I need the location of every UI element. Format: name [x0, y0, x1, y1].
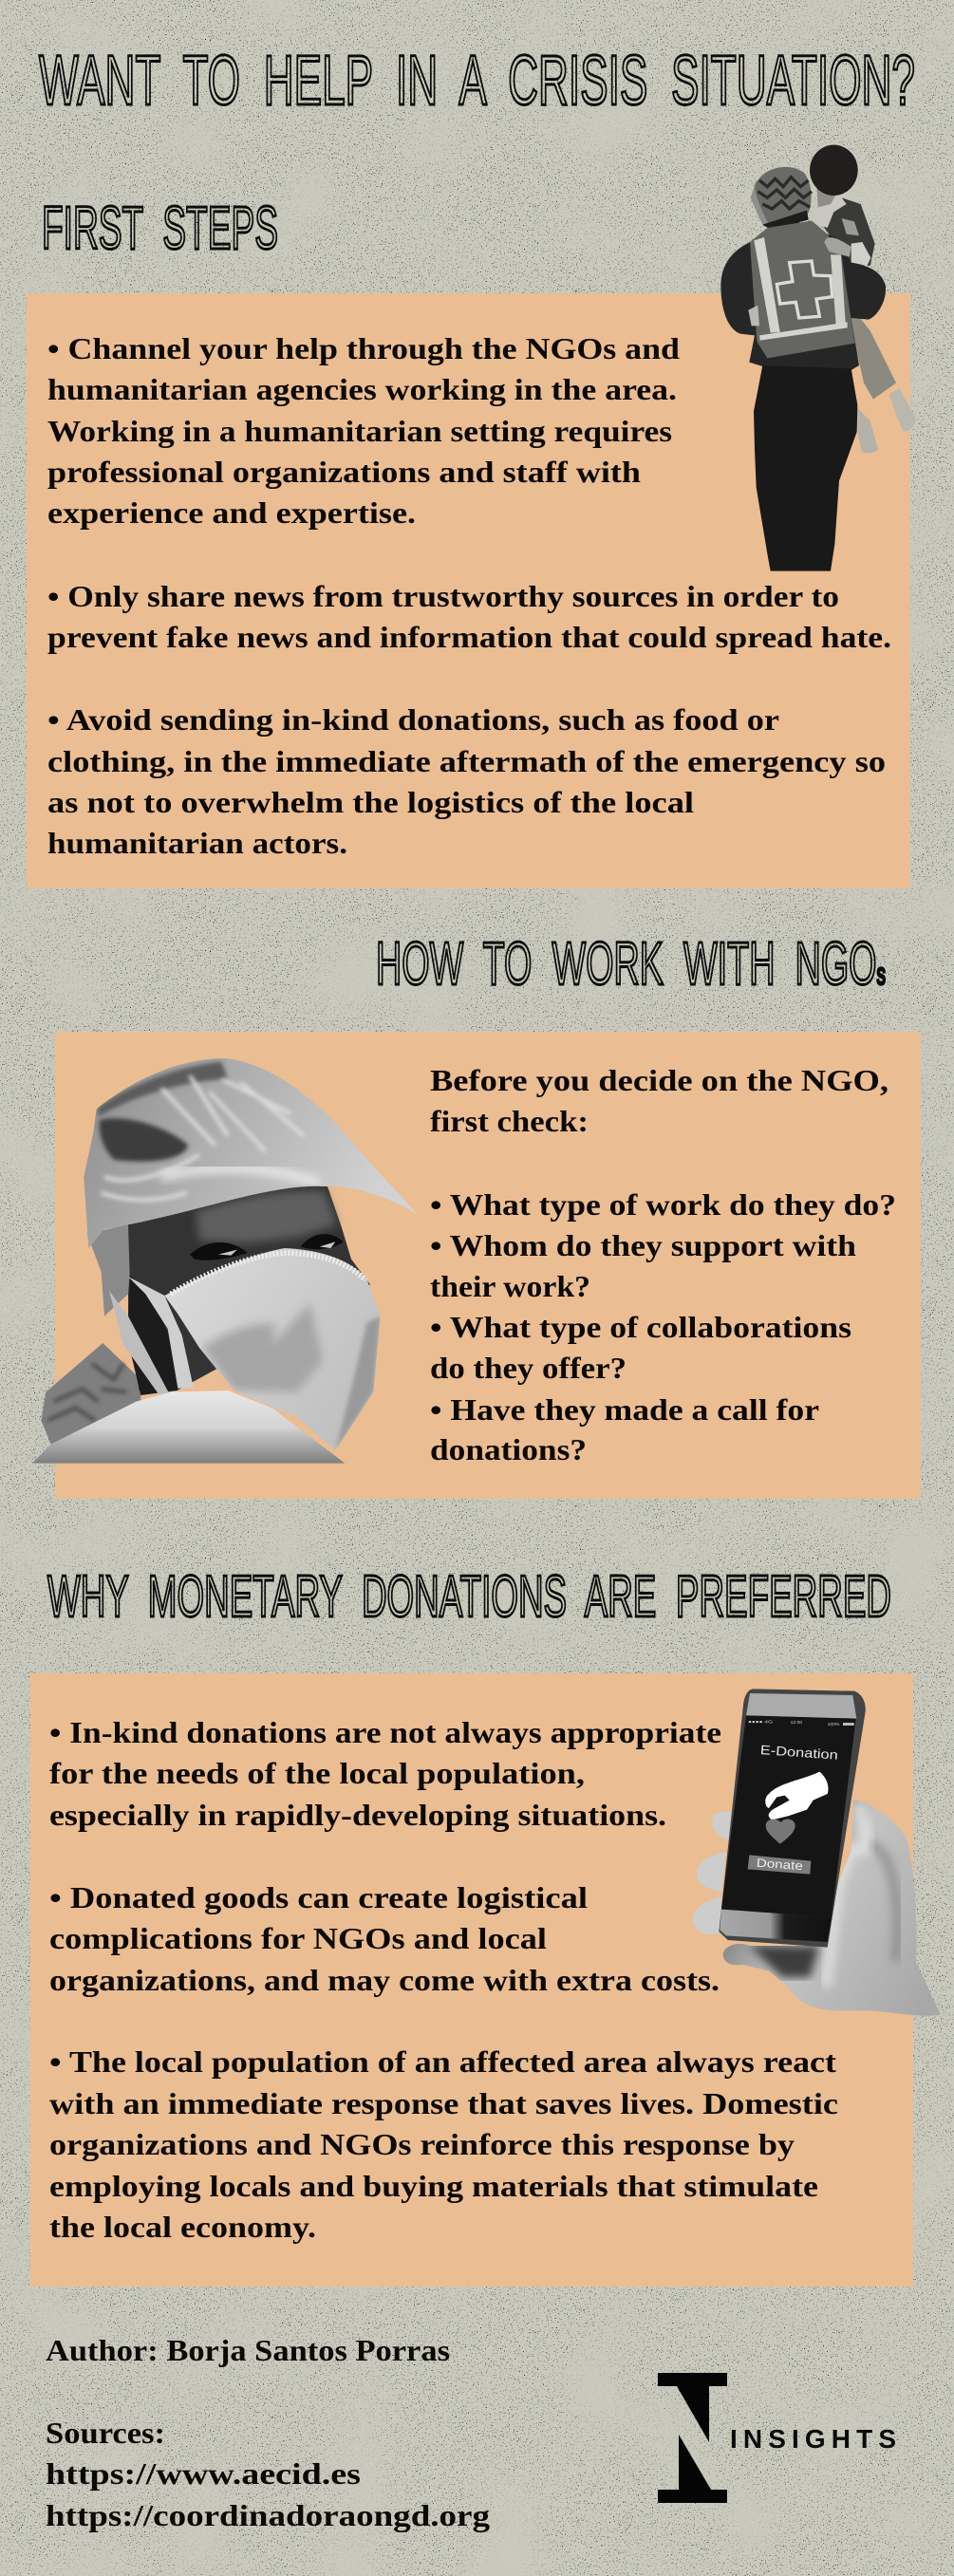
panel background — [55, 1032, 921, 1499]
phone body — [719, 1689, 866, 1948]
child's dress and legs — [849, 304, 916, 453]
eye: right — [301, 1234, 344, 1249]
text block: first steps bullets: • Only share news from trustworthy sources in order to — [47, 579, 839, 613]
text block: monetary donation reasons: • The local population of an affected area always react — [49, 2044, 836, 2079]
hood under visor — [87, 1224, 130, 1316]
eye: left — [190, 1242, 248, 1260]
panel background — [30, 1673, 913, 2287]
text block: monetary donation reasons: especially in rapidly-developing situations. — [49, 1798, 666, 1832]
text block: first steps bullets — [47, 331, 891, 860]
status bar: ●●●● 4G — [748, 1719, 773, 1725]
author and sources: Sources: — [46, 2416, 165, 2450]
text block: first steps bullets: humanitarian agencies working in the area. — [47, 372, 677, 406]
text block: NGO checklist: • What type of work do they do? — [430, 1187, 896, 1222]
phone top bezel — [746, 1693, 856, 1719]
text block: NGO checklist: first check: — [430, 1104, 589, 1138]
visor and hood — [84, 1058, 417, 1248]
text block: NGO checklist: do they offer? — [430, 1351, 627, 1385]
icon: health worker with visor and mask — [32, 1058, 417, 1464]
status bar — [748, 1719, 854, 1727]
palm and thumb — [723, 1801, 941, 2016]
icon: aid worker carrying child — [720, 145, 916, 571]
text block: first steps bullets: experience and expertise. — [47, 495, 416, 530]
panel background — [27, 293, 910, 888]
hat and head — [751, 167, 812, 230]
text block: monetary donation reasons: complications for NGOs and local — [49, 1921, 547, 1955]
status bar: 100% — [828, 1722, 840, 1727]
text block: first steps bullets: humanitarian actors. — [47, 826, 347, 860]
text block: monetary donation reasons: • Donated goods can create logistical — [49, 1880, 588, 1914]
icon: hand placing heart — [765, 1772, 829, 1844]
jacket — [720, 221, 886, 370]
text block: NGO checklist — [430, 1063, 896, 1466]
text block: first steps bullets: • Channel your help through the NGOs and — [47, 331, 680, 365]
trousers — [754, 365, 857, 571]
text block: monetary donation reasons: • In-kind donations are not always appropriate — [49, 1715, 721, 1749]
text block: first steps bullets: • Avoid sending in-kind donations, such as food or — [47, 702, 779, 737]
text block: monetary donation reasons: with an immediate response that saves lives. Domestic — [49, 2086, 838, 2120]
text block: monetary donation reasons — [49, 1715, 838, 2244]
high-visibility vest — [748, 221, 855, 358]
text block: monetary donation reasons: the local economy. — [49, 2210, 316, 2244]
phone bottom bezel — [720, 1910, 832, 1942]
logo wordmark: INSIGHTS — [730, 2424, 896, 2454]
text block: monetary donation reasons: for the needs of the local population, — [49, 1756, 585, 1790]
text block: first steps bullets: clothing, in the immediate aftermath of the emergency so — [47, 744, 886, 778]
screen title: E-Donation — [759, 1743, 838, 1763]
text block: NGO checklist: their work? — [430, 1269, 590, 1303]
panel: first steps — [27, 293, 910, 888]
text block: first steps bullets: professional organizations and staff with — [47, 455, 641, 489]
text block: NGO checklist: • Have they made a call for — [430, 1392, 819, 1427]
text block: monetary donation reasons: organizations and NGOs reinforce this response by — [49, 2127, 795, 2161]
author and sources: https://coordinadoraongd.org — [46, 2498, 490, 2532]
author and sources: Author: Borja Santos Porras — [46, 2333, 450, 2367]
heading: first steps: FIRST STEPS — [42, 194, 278, 262]
text block: NGO checklist: • Whom do they support with — [430, 1228, 856, 1262]
text block: first steps bullets: Working in a humanitarian setting requires — [47, 414, 672, 448]
text block: first steps bullets: as not to overwhelm the logistics of the local — [47, 785, 694, 819]
text block: NGO checklist: Before you decide on the NGO, — [430, 1063, 889, 1097]
shoulder — [32, 1391, 345, 1464]
text block: NGO checklist: donations? — [430, 1432, 587, 1466]
icon: hand holding phone with e-donation screen — [692, 1689, 941, 2016]
scarf — [41, 1343, 140, 1447]
author and sources: https://www.aecid.es — [46, 2456, 361, 2491]
text block: first steps bullets: prevent fake news and information that could spread hate. — [47, 620, 891, 654]
author and sources — [46, 2333, 490, 2532]
phone screen — [721, 1715, 856, 1917]
fingers — [692, 1811, 735, 1934]
child's head and upper body — [810, 145, 875, 266]
logo mark — [658, 2373, 727, 2503]
dark hair and neck — [128, 1275, 180, 1395]
logo: insights — [658, 2373, 896, 2503]
text block: monetary donation reasons: employing locals and buying materials that stimulate — [49, 2169, 818, 2203]
face — [128, 1186, 370, 1391]
status bar: 12:00 — [791, 1720, 802, 1726]
panel: why monetary donations — [30, 1673, 913, 2287]
donate button: Donate — [756, 1857, 803, 1873]
donate button — [748, 1855, 811, 1875]
text block: NGO checklist: • What type of collaborations — [430, 1310, 851, 1344]
surgical mask — [109, 1248, 381, 1450]
text block: monetary donation reasons: organizations, and may come with extra costs. — [49, 1963, 720, 1997]
panel: how to work with NGOs — [55, 1032, 921, 1499]
